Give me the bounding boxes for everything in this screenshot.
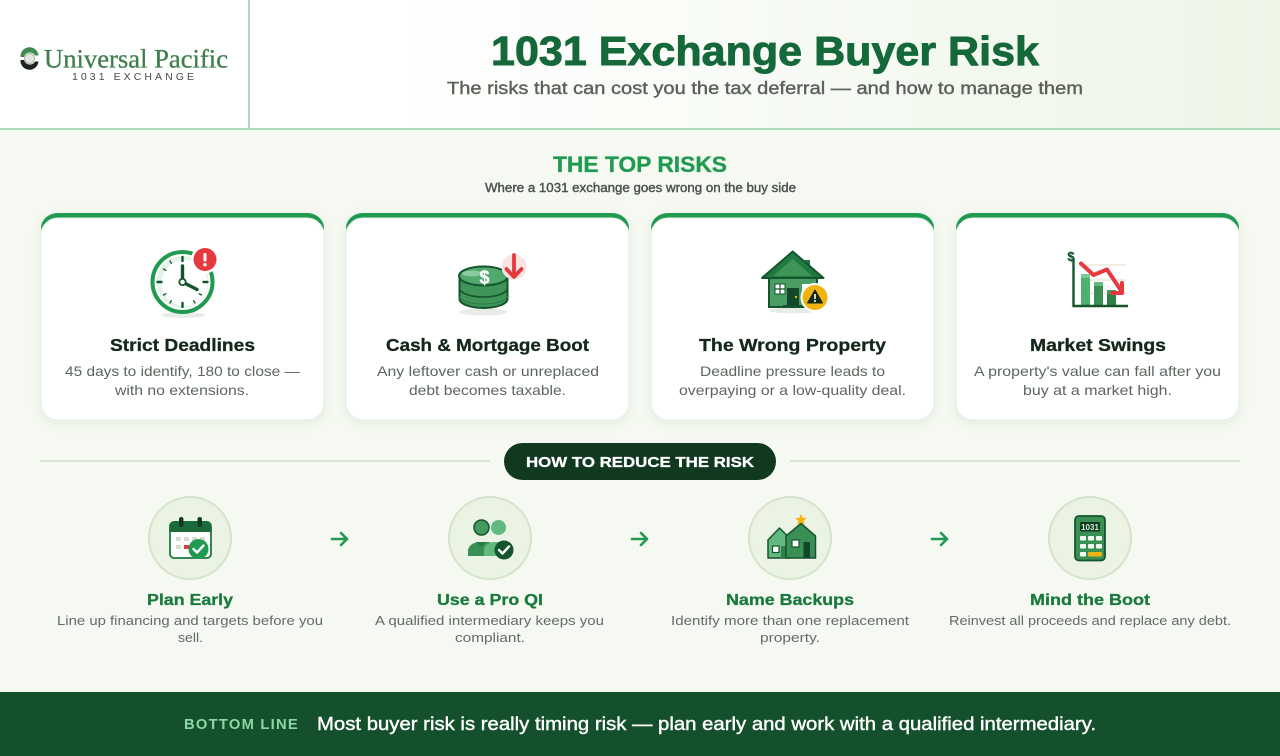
card description: Any leftover cash or unreplaced xyxy=(377,363,599,379)
card description: A property's value can fall after you xyxy=(974,363,1221,379)
arrow xyxy=(332,533,347,545)
icon: house with warning xyxy=(762,252,830,314)
card title: Strict Deadlines xyxy=(110,335,255,355)
step title: Plan Early xyxy=(147,592,233,609)
logo: Universal Pacific 1031 Exchange: Universal Pacific xyxy=(44,44,228,74)
panel: the wrong property xyxy=(651,213,934,420)
card description: debt becomes taxable. xyxy=(409,382,566,398)
icon: people with check xyxy=(449,497,531,579)
step: use a pro QI xyxy=(375,497,604,645)
card description: 45 days to identify, 180 to close — xyxy=(65,363,300,379)
step title: Mind the Boot xyxy=(1030,592,1151,609)
card description xyxy=(377,363,599,398)
card description: with no extensions. xyxy=(114,382,249,398)
logo: Universal Pacific 1031 Exchange xyxy=(20,44,228,83)
card description xyxy=(679,363,906,398)
arrow xyxy=(932,533,947,545)
logo: Universal Pacific 1031 Exchange: 1031 EXCHANGE xyxy=(72,71,194,83)
icon: calendar with check xyxy=(149,497,231,579)
icon: cash stack with down arrow xyxy=(459,254,526,316)
footer message: Most buyer risk is really timing risk — plan early and work with a qualified intermediary. xyxy=(317,714,1096,734)
step: name backups xyxy=(671,497,909,645)
step description: sell. xyxy=(178,630,203,645)
card description xyxy=(65,363,300,398)
step title: Use a Pro QI xyxy=(437,592,543,609)
card description: Deadline pressure leads to xyxy=(700,363,885,379)
footer: bottom line xyxy=(0,692,1280,756)
footer label: BOTTOM LINE xyxy=(184,717,299,733)
step title: Name Backups xyxy=(726,592,854,609)
step description: Identify more than one replacement xyxy=(671,613,909,628)
card description xyxy=(974,363,1221,398)
card title: Cash & Mortgage Boot xyxy=(386,335,589,355)
section subheading: Where a 1031 exchange goes wrong on the buy side xyxy=(485,181,796,195)
title: 1031 Exchange Buyer Risk xyxy=(491,28,1039,74)
step description: Reinvest all proceeds and replace any debt. xyxy=(949,613,1231,628)
step: mind the boot xyxy=(949,497,1231,628)
banner: how to reduce the risk: HOW TO REDUCE THE RISK xyxy=(526,454,754,471)
banner: how to reduce the risk xyxy=(504,443,776,480)
card title: The Wrong Property xyxy=(699,335,886,355)
icon: two houses with star xyxy=(749,497,831,579)
card title: Market Swings xyxy=(1030,335,1166,355)
icon: calculator xyxy=(1049,497,1131,579)
icon: clock with alert xyxy=(152,246,219,318)
step description xyxy=(57,613,323,645)
subtitle: The risks that can cost you the tax deferral — and how to manage them xyxy=(447,78,1083,98)
icon: falling market chart: $ xyxy=(1067,249,1075,264)
step description: A qualified intermediary keeps you xyxy=(375,613,604,628)
step description xyxy=(671,613,909,645)
icon: cash stack with down arrow: $ xyxy=(479,268,490,288)
step: plan early xyxy=(57,497,323,645)
card description: buy at a market high. xyxy=(1023,382,1172,398)
step description: Line up financing and targets before you xyxy=(57,613,323,628)
icon: falling market chart xyxy=(1067,249,1128,306)
header band xyxy=(0,0,1280,130)
panel: market swings xyxy=(956,213,1239,420)
icon: calculator: 1031 xyxy=(1081,523,1099,532)
step description: compliant. xyxy=(455,630,525,645)
section heading: the top risks: THE TOP RISKS xyxy=(553,152,727,177)
panel: strict deadlines xyxy=(41,213,324,420)
arrow xyxy=(632,533,647,545)
panel: cash and mortgage boot xyxy=(346,213,629,420)
card description: overpaying or a low-quality deal. xyxy=(679,382,906,398)
step description: property. xyxy=(760,630,820,645)
step description xyxy=(375,613,604,645)
